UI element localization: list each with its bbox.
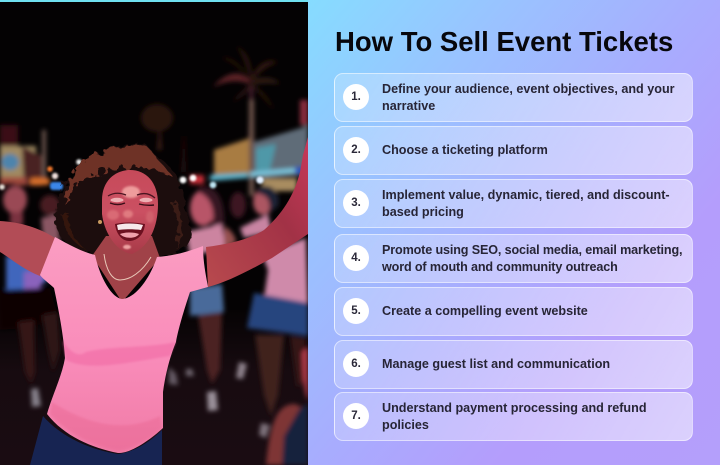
step 3 text: based pricing bbox=[382, 204, 464, 218]
lights bbox=[0, 159, 264, 190]
step 6 bbox=[334, 340, 693, 389]
step 6 text: Manage guest list and communication bbox=[382, 357, 610, 371]
necklace bbox=[104, 254, 151, 280]
number badge 7: 7. bbox=[351, 410, 361, 422]
step 7 text: Understand payment processing and refund bbox=[382, 401, 647, 415]
eyes closed bbox=[110, 203, 154, 205]
pink shirt bbox=[40, 237, 208, 453]
step 3 bbox=[334, 179, 693, 228]
background buildings left bbox=[0, 125, 50, 186]
number badge 1: 1. bbox=[351, 91, 361, 103]
eyebrows bbox=[108, 193, 155, 198]
shirt shading bbox=[62, 340, 176, 366]
seated person bottom right bbox=[266, 347, 308, 465]
number badge 3: 3. bbox=[351, 197, 361, 209]
neck and chest bbox=[92, 236, 160, 302]
number badge 4: 4. bbox=[351, 252, 361, 264]
step 2 bbox=[334, 126, 693, 175]
panel: event photo bbox=[0, 0, 308, 465]
right arm bbox=[206, 137, 308, 287]
forehead and cheek highlights bbox=[107, 186, 154, 223]
number badge 2 bbox=[343, 137, 369, 163]
crowd silhouettes left bbox=[0, 183, 60, 407]
title: How To Sell Event Tickets bbox=[335, 26, 673, 57]
step 3 text: Implement value, dynamic, tiered, and discount- bbox=[382, 188, 670, 202]
number badge 4 bbox=[343, 245, 369, 271]
number badge 5 bbox=[343, 298, 369, 324]
step 7 text: policies bbox=[382, 418, 429, 432]
step 4 bbox=[334, 234, 693, 283]
panel: steps background bbox=[308, 0, 720, 465]
number badge 6: 6. bbox=[351, 358, 361, 370]
woman in pink shirt bbox=[0, 137, 308, 465]
step 2 text: Choose a ticketing platform bbox=[382, 143, 548, 157]
background buildings right bbox=[190, 100, 308, 196]
step 4 text: Promote using SEO, social media, email marketing, bbox=[382, 243, 682, 257]
crowd silhouettes right bbox=[169, 186, 308, 438]
step 7 text bbox=[382, 401, 647, 432]
step 1 text bbox=[382, 82, 675, 112]
step 3 text bbox=[382, 188, 670, 218]
background palm trees bbox=[141, 46, 280, 172]
number badge 1 bbox=[343, 84, 369, 110]
hair bbox=[55, 142, 190, 260]
step 1 text: Define your audience, event objectives, and your bbox=[382, 82, 675, 96]
step 4 text: word of mouth and community outreach bbox=[382, 260, 618, 274]
step 5 text: Create a compelling event website bbox=[382, 304, 588, 318]
step 1 bbox=[334, 73, 693, 122]
jeans bbox=[30, 416, 162, 465]
left arm bbox=[0, 221, 55, 276]
step 4 text bbox=[382, 243, 682, 274]
step 5 bbox=[334, 287, 693, 336]
face bbox=[102, 170, 158, 254]
ground bbox=[0, 310, 308, 465]
smiling mouth bbox=[115, 222, 145, 241]
step 1 text: narrative bbox=[382, 98, 435, 112]
chin highlight bbox=[123, 245, 131, 249]
number badge 7 bbox=[343, 403, 369, 429]
number badge 6 bbox=[343, 351, 369, 377]
number badge 5: 5. bbox=[351, 305, 361, 317]
earring bbox=[98, 220, 102, 224]
number badge 3 bbox=[343, 190, 369, 216]
step 7 bbox=[334, 392, 693, 441]
number badge 2: 2. bbox=[351, 144, 361, 156]
